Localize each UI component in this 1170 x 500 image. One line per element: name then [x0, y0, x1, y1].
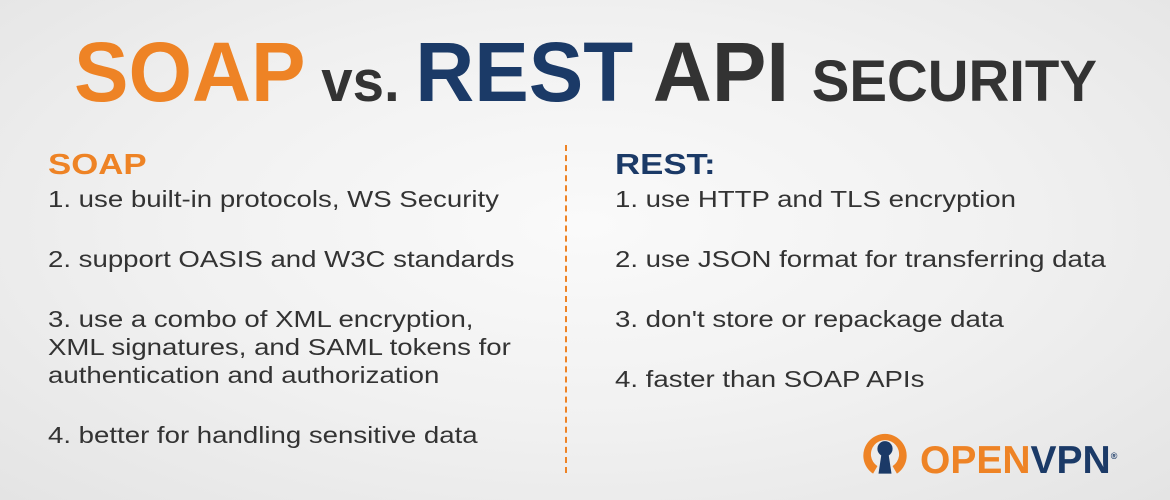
panel: REST: 4. faster than SOAP APIs	[615, 366, 924, 392]
panel: REST	[615, 149, 1106, 392]
panel: SOAP: 1. use built-in protocols, WS Security	[48, 186, 499, 212]
panel: SOAP: 2. support OASIS and W3C standards	[48, 246, 514, 272]
panel: SOAP: 3. use a combo of XML encryption,	[48, 306, 473, 332]
panel: REST: 2. use JSON format for transferring data	[615, 246, 1106, 272]
panel: SOAP: authentication and authorization	[48, 362, 439, 388]
panel: REST: REST:	[615, 149, 716, 181]
logo text: OPENVPN®	[920, 439, 1117, 482]
title: SOAP vs. REST API SECURITY	[74, 25, 1097, 119]
panel: REST: 3. don't store or repackage data	[615, 306, 1004, 332]
logo: OpenVPN	[863, 434, 1118, 482]
panel: SOAP: 4. better for handling sensitive data	[48, 422, 478, 448]
panel: SOAP: XML signatures, and SAML tokens for	[48, 334, 511, 360]
panel: SOAP	[48, 149, 514, 448]
panel: REST: 1. use HTTP and TLS encryption	[615, 186, 1016, 212]
divider	[565, 145, 567, 473]
panel: SOAP: SOAP	[48, 149, 147, 181]
icon: keyhole	[863, 434, 907, 474]
